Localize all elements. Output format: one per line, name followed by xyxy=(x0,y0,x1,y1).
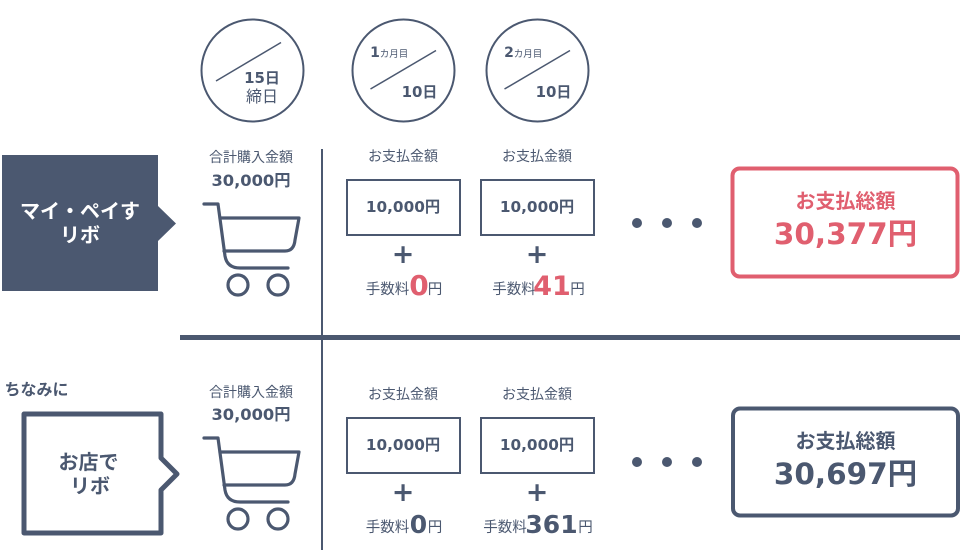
column: second month payment, top row: 円 xyxy=(570,282,585,298)
text: total purchase amount, top row: 30,000円 xyxy=(211,171,291,190)
column: second month payment, bottom row: 10,000円 xyxy=(500,436,574,454)
text: total purchase amount, top row xyxy=(209,149,293,190)
panel: in-store revolving label: お店で xyxy=(58,451,118,474)
column: second month payment, bottom row xyxy=(481,386,594,539)
column: first month payment, top row: 0 xyxy=(409,269,429,302)
callout: total payment, top row: お支払総額 xyxy=(796,190,896,213)
callout: total payment, top row: 30,377円 xyxy=(774,217,917,251)
column: first month payment, top row: + xyxy=(392,239,414,270)
column: first month payment, top row: 手数料 xyxy=(366,281,409,298)
callout: total payment, bottom row: 30,697円 xyxy=(774,457,917,491)
icon: closing date circle: 15日 xyxy=(244,69,280,87)
panel: My Pay Revo label: リボ xyxy=(60,224,100,247)
column: second month payment, bottom row: お支払金額 xyxy=(502,386,572,402)
column: first month payment, top row xyxy=(347,148,460,302)
icon: second month circle: 10日 xyxy=(536,83,571,101)
text: by the way: ちなみに xyxy=(4,381,69,399)
icon: first month circle: 10日 xyxy=(402,83,437,101)
column: second month payment, bottom row: 円 xyxy=(578,520,593,536)
icon: shopping cart, bottom row xyxy=(204,438,299,529)
callout: total payment, bottom row xyxy=(733,408,958,516)
divider lines xyxy=(180,149,960,550)
column: second month payment, top row: + xyxy=(526,239,548,270)
column: second month payment, top row: 手数料 xyxy=(492,281,536,298)
column: second month payment, top row: 41 xyxy=(533,271,571,302)
icon: second month circle xyxy=(486,20,588,122)
column: second month payment, top row xyxy=(481,148,594,302)
icon: shopping cart, top row xyxy=(204,204,299,295)
icon: closing date circle xyxy=(202,20,304,122)
column: second month payment, bottom row: 361 xyxy=(525,510,578,539)
column: second month payment, top row: 10,000円 xyxy=(500,198,574,216)
callout: total payment, bottom row: お支払総額 xyxy=(796,430,896,453)
panel: My Pay Revo label: マイ・ペイす xyxy=(20,201,140,223)
column: first month payment, bottom row: + xyxy=(392,477,414,508)
column: first month payment, bottom row: 手数料 xyxy=(366,519,409,536)
column: first month payment, top row: 円 xyxy=(428,282,442,298)
icon: ellipsis dots, top row xyxy=(632,218,702,228)
text: total purchase amount, top row: 合計購入金額 xyxy=(209,149,293,165)
column: first month payment, bottom row xyxy=(347,386,460,539)
text: total purchase amount, bottom row: 30,000円 xyxy=(211,405,291,424)
column: first month payment, top row: お支払金額 xyxy=(368,148,438,164)
callout: total payment, top row xyxy=(732,168,958,276)
text: total purchase amount, bottom row: 合計購入金額 xyxy=(209,384,293,400)
icon: first month circle: カ月目 xyxy=(380,49,408,60)
column: first month payment, bottom row: 0 xyxy=(410,510,427,539)
column: first month payment, top row: 10,000円 xyxy=(366,198,440,216)
column: second month payment, bottom row: 手数料 xyxy=(483,519,527,536)
text: total purchase amount, bottom row xyxy=(209,384,293,424)
column: first month payment, bottom row: 円 xyxy=(428,520,442,536)
icon: second month circle: カ月目 xyxy=(514,49,542,60)
icon: first month circle: 1 xyxy=(370,45,380,61)
column: second month payment, bottom row: + xyxy=(526,477,548,508)
column: second month payment, top row: お支払金額 xyxy=(502,148,572,164)
icon: closing date circle: 締日 xyxy=(246,88,278,106)
column: first month payment, bottom row: お支払金額 xyxy=(368,386,438,402)
panel: in-store revolving label: リボ xyxy=(70,475,110,498)
panel: My Pay Revo label xyxy=(2,155,176,291)
panel: in-store revolving label xyxy=(24,414,177,533)
column: first month payment, bottom row: 10,000円 xyxy=(366,436,440,454)
icon: second month circle: 2 xyxy=(504,45,514,61)
icon: ellipsis dots, bottom row xyxy=(632,457,702,467)
icon: first month circle xyxy=(352,20,454,122)
